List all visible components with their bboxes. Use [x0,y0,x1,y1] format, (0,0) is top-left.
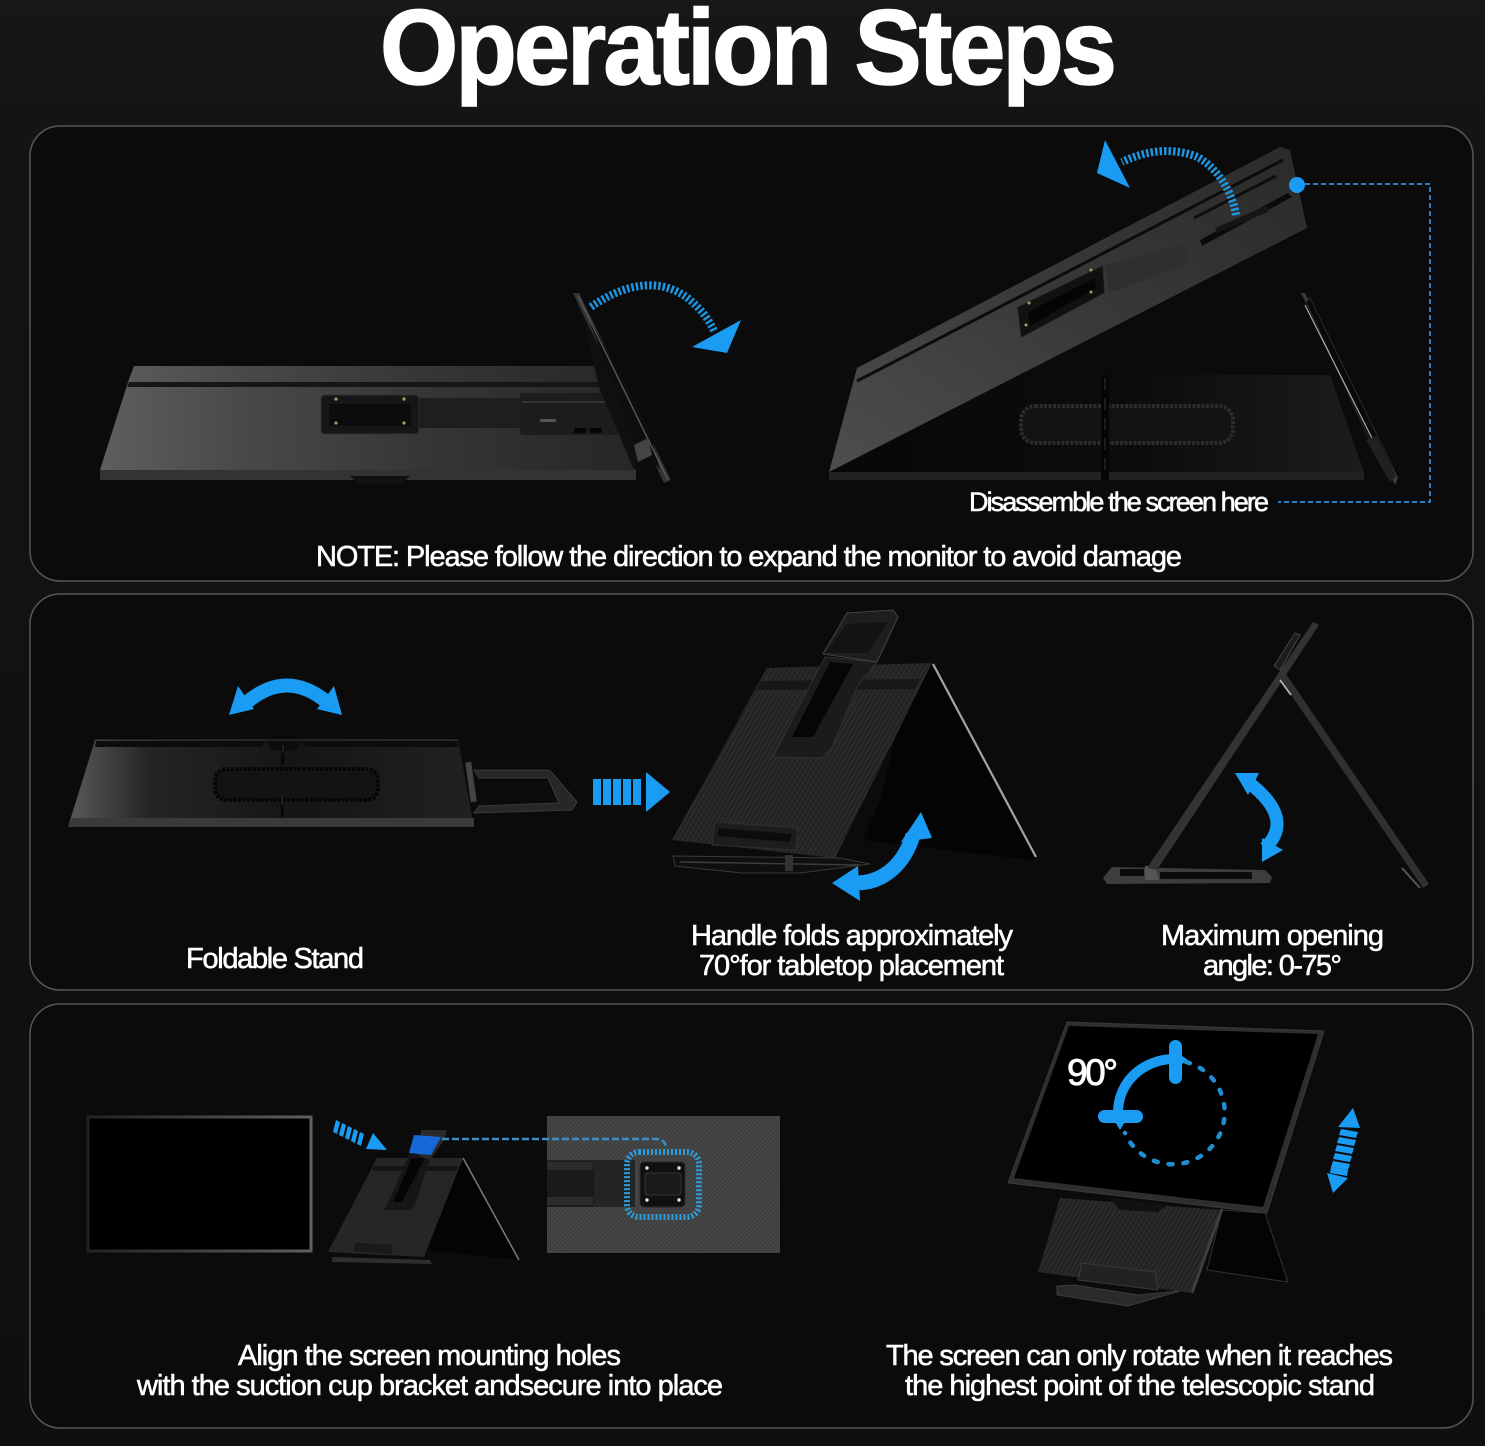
label: align screen: with the suction cup bracket andsecure into place [136,1370,723,1402]
arrow: bidirectional fold [229,686,342,715]
label: handle fold: 70°for tabletop placement [699,950,1004,982]
label: foldable stand: Foldable Stand [186,943,364,975]
label: handle fold: Handle folds approximately [691,920,1014,952]
label: rotate condition: The screen can only rotate when it reaches [886,1340,1393,1372]
label: rotate condition: the highest point of the telescopic stand [905,1370,1375,1402]
arrow: raise the screen [1097,140,1236,215]
note: NOTE: Please follow the direction to expand the monitor to avoid damage [316,541,1182,573]
arrow: stepped right arrow [593,772,670,812]
device: stand folded as tent [672,610,1037,873]
device: monitor tilted up from stand [829,147,1398,485]
label: maximum opening: Maximum opening [1161,920,1384,952]
arrow: telescopic up and down [1327,1108,1360,1193]
device: foldable stand flat [68,740,577,827]
label: align screen [136,1340,723,1402]
label: rotate condition [886,1340,1393,1402]
label: handle fold [691,920,1014,982]
callout: disassemble point connector [1278,177,1430,502]
connector: bracket to mount holes [442,1139,699,1217]
label: 90 degrees: 90° [1067,1052,1118,1093]
device: screen back with mount [547,1116,780,1253]
label: disassemble the screen: Disassemble the screen here [969,487,1269,517]
panel: foldable stand [30,594,1473,990]
device: monitor lying flat [100,293,671,484]
device: rotating monitor on stand [1008,1022,1324,1306]
device: screen front [88,1117,311,1251]
label: align screen: Align the screen mounting holes [238,1340,621,1372]
arrow: handle fold 70 degrees [832,812,932,901]
label: maximum opening [1161,920,1384,982]
arrow: fold screen down [591,285,741,353]
arrow: opening angle [1235,773,1283,862]
label: maximum opening: angle: 0-75° [1203,950,1342,982]
device: side view maximum opening [1103,622,1429,888]
device: mini stand with bracket [328,1130,519,1264]
panel: mount and rotate [30,1004,1473,1428]
panel: expand the monitor [30,126,1473,581]
arrow: diagonal dashed [333,1120,387,1150]
